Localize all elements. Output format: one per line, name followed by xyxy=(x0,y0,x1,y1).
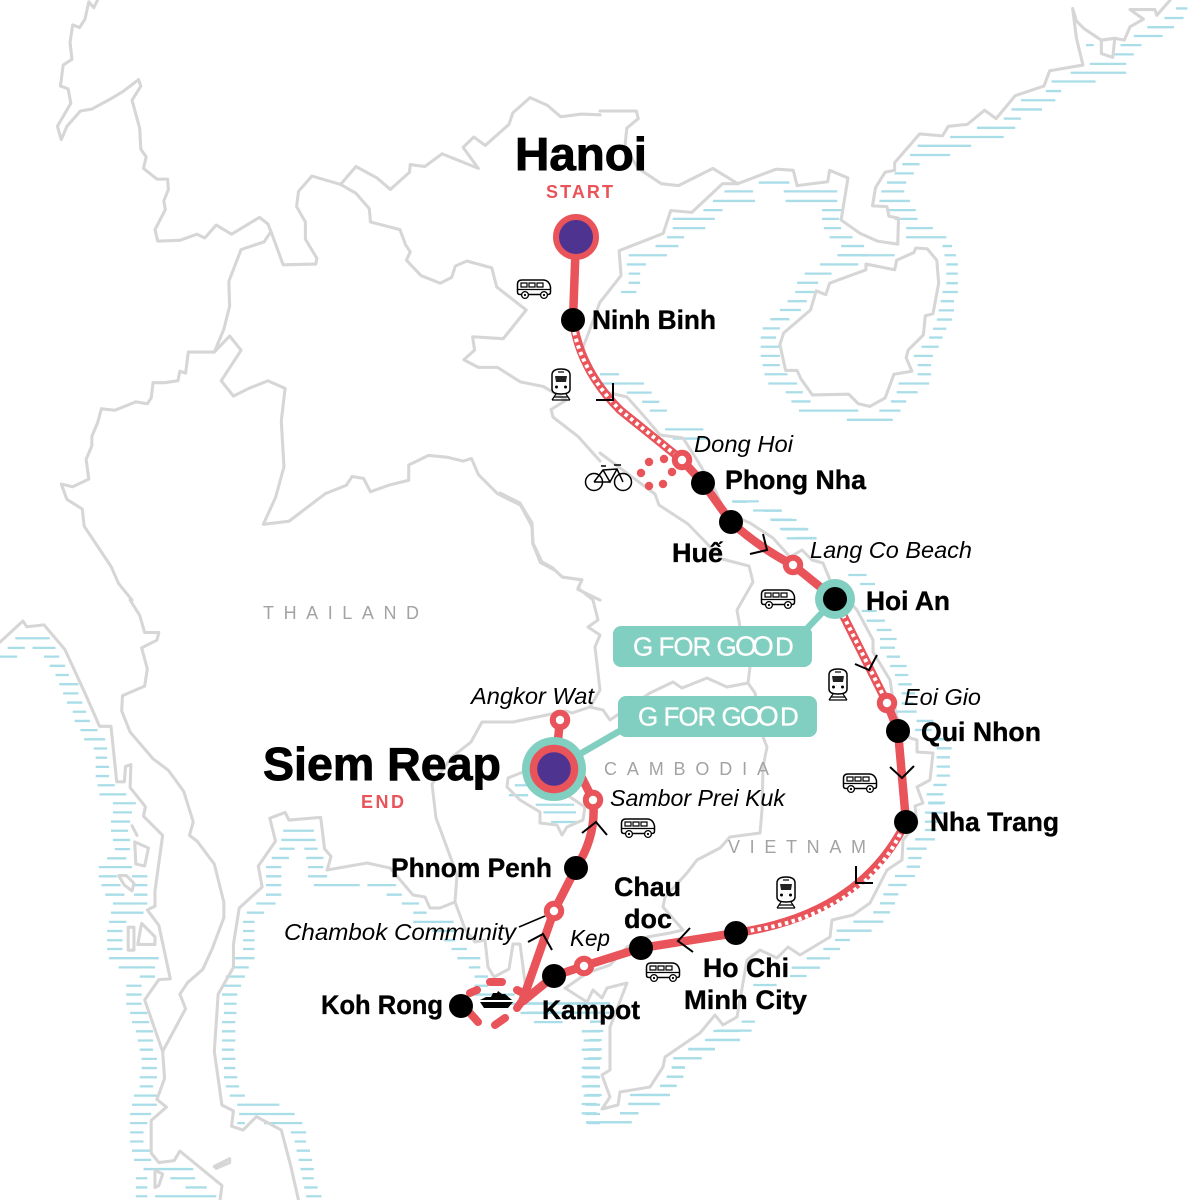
direction arrows xyxy=(528,383,914,952)
stop: Hanoi xyxy=(556,217,596,257)
black stops xyxy=(449,308,918,1018)
place: Ho Chi Minh City xyxy=(684,953,807,1015)
route: road and rail xyxy=(522,237,906,1002)
rail: Ninh Binh to Dong Hoi xyxy=(573,320,682,460)
badge: G for Good, Hoi An: D xyxy=(775,632,793,662)
stop label: Angkor Wat: Angkor Wat xyxy=(469,683,596,709)
badge: G for Good, Siem Reap: D xyxy=(780,702,798,732)
place: Nha Trang: Nha Trang xyxy=(930,807,1059,837)
badge: G for Good, Hoi An xyxy=(613,626,812,667)
badge: G for Good, Siem Reap xyxy=(618,696,817,737)
icon: train near Ho Chi Minh City xyxy=(777,877,795,908)
badge: G for Good, Siem Reap: OO xyxy=(740,700,778,732)
leader line: Chambok Community xyxy=(519,916,545,927)
place: Ho Chi Minh City: Ho Chi xyxy=(703,953,789,983)
rail: Nha Trang to Ho Chi Minh City xyxy=(736,822,906,933)
badge: G for Good, Hoi An: OO xyxy=(735,630,773,662)
label: START: START xyxy=(546,182,613,202)
icon: bus near Ninh Binh xyxy=(518,280,550,298)
icon: train near Hoi An xyxy=(829,669,847,700)
place: Huế: Huế xyxy=(672,538,724,568)
place: Chau doc: Chau xyxy=(614,872,681,902)
country label: Thailand: THAILAND xyxy=(263,603,419,623)
stop label: Lang Co Beach: Lang Co Beach xyxy=(810,537,972,563)
stop label: Kep: Kep xyxy=(570,925,610,951)
place: Koh Rong: Koh Rong xyxy=(321,990,443,1020)
ring stops xyxy=(547,453,894,973)
title: Hanoi: Hanoi xyxy=(515,128,647,180)
icon: bus near Chau doc xyxy=(646,963,680,981)
place: Qui Nhon: Qui Nhon xyxy=(921,717,1041,747)
place: Chau doc xyxy=(614,872,681,934)
island: Hainan xyxy=(780,248,939,406)
stop label: Chambok Community: Chambok Community xyxy=(284,919,518,945)
icon: ferry xyxy=(480,991,513,1008)
place: Hoi An: Hoi An xyxy=(866,586,950,616)
badge: G for Good, Siem Reap: G FOR G xyxy=(638,702,741,732)
stop label: Eoi Gio: Eoi Gio xyxy=(904,684,981,710)
place: Ho Chi Minh City: Minh City xyxy=(684,985,807,1015)
icon: bus near Qui Nhon xyxy=(844,774,876,792)
bike route dots xyxy=(637,455,676,490)
rail: Hoi An to Eoi Gio xyxy=(835,599,887,703)
label: END: END xyxy=(361,792,404,812)
place: Ninh Binh: Ninh Binh xyxy=(592,305,716,335)
icon: bicycle xyxy=(586,465,632,490)
connector: Hoi An to G for Good xyxy=(800,599,835,636)
stop label: Dong Hoi: Dong Hoi xyxy=(694,431,794,457)
connector: Siem Reap to G for Good xyxy=(554,725,630,769)
icon: bus near Hoi An xyxy=(762,590,794,608)
place: Phong Nha: Phong Nha xyxy=(725,465,867,495)
icon: bus near Sambor Prei Kuk xyxy=(622,819,654,837)
lake: Tonle Sap xyxy=(507,770,585,835)
stop label: Sambor Prei Kuk: Sambor Prei Kuk xyxy=(610,785,786,811)
stop: Hoi An xyxy=(815,579,855,619)
place: Chau doc: doc xyxy=(624,904,672,934)
stop: Siem Reap xyxy=(522,737,586,801)
badge: G for Good, Hoi An: G FOR G xyxy=(633,632,736,662)
place: Phnom Penh: Phnom Penh xyxy=(391,853,552,883)
icon: train near Ninh Binh xyxy=(552,369,570,400)
place: Kampot: Kampot xyxy=(542,995,640,1025)
title: Siem Reap: Siem Reap xyxy=(263,738,501,790)
country label: Vietnam: VIETNAM xyxy=(728,837,866,857)
boat route: Kampot to Koh Rong xyxy=(470,982,525,1025)
country label: Cambodia: CAMBODIA xyxy=(604,759,769,779)
